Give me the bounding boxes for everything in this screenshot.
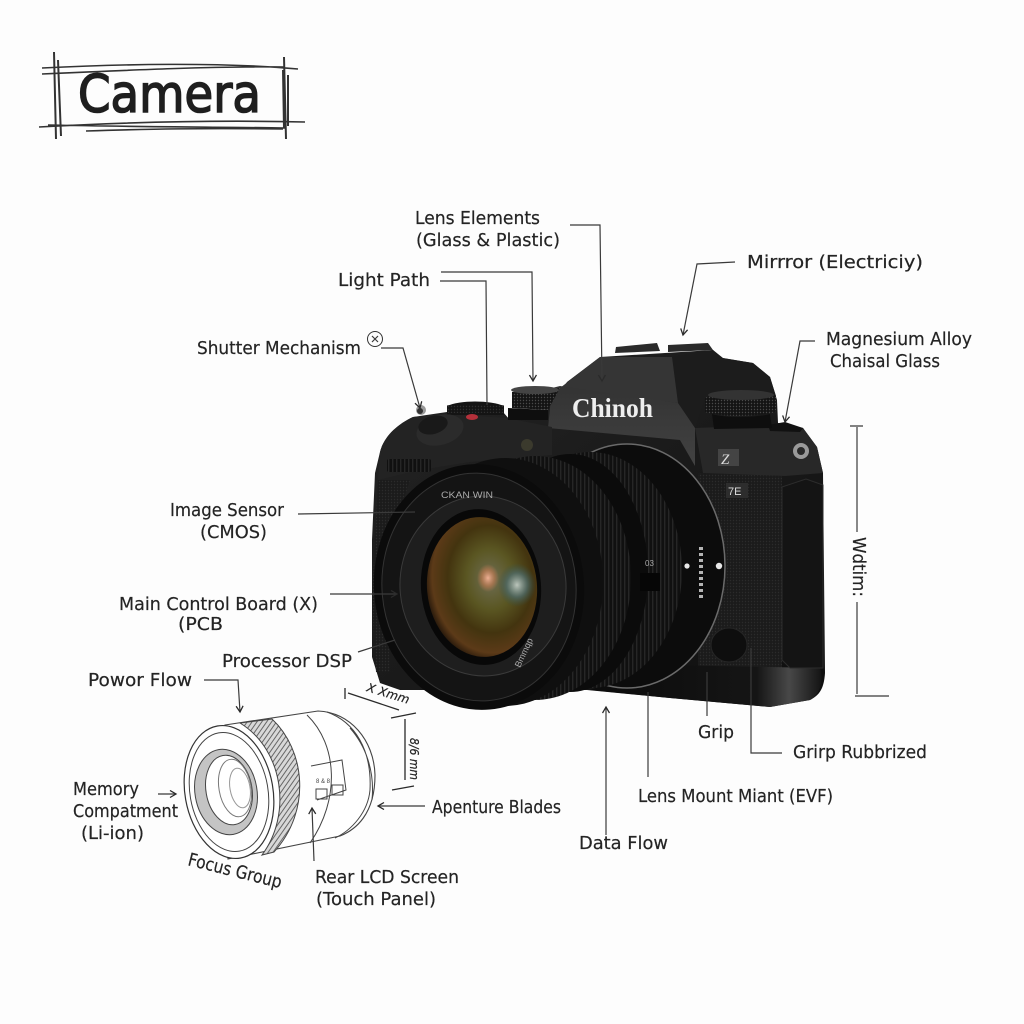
front rim xyxy=(174,718,284,866)
title: Camera in sketched box: Camera xyxy=(78,65,261,125)
label: Rear LCD Screen xyxy=(312,808,459,910)
label: Lens Elements: (Glass & Plastic) xyxy=(416,230,560,251)
lens front outer xyxy=(364,455,594,719)
lens engraved text: CKAN WIN xyxy=(441,490,493,500)
label: Power Flow xyxy=(88,670,240,712)
lens lower text: Bmmqp xyxy=(513,637,535,669)
dimension: X Xmm xyxy=(345,680,411,710)
label: Image Sensor: (CMOS) xyxy=(200,522,267,543)
left grip leather xyxy=(372,480,410,672)
label: Lens Elements: Lens Elements xyxy=(415,208,540,229)
sketch switch panel xyxy=(311,760,346,800)
label: Rear LCD Screen: (Touch Panel) xyxy=(316,889,436,910)
label: Magnesium Alloy xyxy=(785,329,972,422)
brand label: Chinoh xyxy=(572,393,653,423)
label: Memory Compartment: Compatment xyxy=(73,801,178,822)
shutter step xyxy=(768,422,803,432)
barrel outline xyxy=(225,711,375,859)
mode dial xyxy=(447,402,504,420)
label: Focus Group: Focus Group xyxy=(186,849,284,893)
label: Image Sensor xyxy=(170,500,415,543)
viewfinder top face xyxy=(560,357,678,403)
label: Mirror: Mirrror (Electriciy) xyxy=(747,252,923,273)
lens barrel smooth xyxy=(407,458,603,706)
rear end curves xyxy=(327,712,373,838)
label: Memory Compartment xyxy=(73,779,178,844)
rear ribbed ring xyxy=(498,452,682,688)
lens gloss ring xyxy=(372,465,586,709)
rear hump xyxy=(672,350,776,428)
front ring 2 xyxy=(180,726,278,858)
mode switch xyxy=(640,559,660,591)
label: Lens Elements xyxy=(415,208,602,381)
label: Lens Mount: Lens Mount Miant (EVF) xyxy=(638,786,833,807)
dimension: Wdtim xyxy=(848,426,889,696)
label: Mirror xyxy=(683,252,923,335)
sketch lens drawing xyxy=(174,711,375,866)
label: Grip Rubberized xyxy=(751,648,927,763)
label: Memory Compartment: Memory xyxy=(73,779,139,800)
dimension: 8/6 mm: 8/6 mm xyxy=(407,738,421,780)
finder wheel xyxy=(387,459,431,472)
lens reflections xyxy=(477,563,536,607)
label: Magnesium Alloy: Chaisal Glass xyxy=(830,351,940,372)
label: Processor DSP xyxy=(222,640,395,672)
label: Aperture Blades: Apenture Blades xyxy=(432,797,561,818)
front button xyxy=(711,628,747,662)
dimension: X Xmm: X Xmm xyxy=(364,680,411,707)
badge marks: Z xyxy=(721,452,730,468)
label: Main Control Board xyxy=(119,594,397,635)
glass ellipses xyxy=(200,752,258,828)
label: Processor DSP: Processor DSP xyxy=(222,651,352,672)
label: Magnesium Alloy: Magnesium Alloy xyxy=(826,329,972,350)
dimension: 8/6 mm xyxy=(391,713,421,790)
lens glass xyxy=(421,512,543,662)
ribbed focus ring xyxy=(240,719,300,855)
left top deck xyxy=(378,414,552,480)
badge marks xyxy=(718,449,748,498)
lens baffle xyxy=(414,504,548,670)
camera photo xyxy=(364,343,825,719)
front lamp xyxy=(521,439,533,451)
hot shoe xyxy=(615,343,713,353)
label: Light Path: Light Path xyxy=(338,270,430,291)
label: Grip Rubberized: Grirp Rubbrized xyxy=(793,742,927,763)
label: Grip xyxy=(698,672,734,743)
dimension: Wdtim: Wdtim: xyxy=(848,537,869,597)
label: Main Control Board: Main Control Board (X) xyxy=(119,594,318,615)
grey inner ring xyxy=(188,744,264,840)
label: Data Flow: Data Flow xyxy=(579,833,668,854)
right dial xyxy=(705,390,776,429)
top control wheel xyxy=(413,405,467,451)
sketch switch panel: 8 & 8 xyxy=(316,779,331,785)
lens inner ring xyxy=(392,489,574,683)
label: Light Path xyxy=(338,270,533,405)
barrel rings xyxy=(307,715,331,843)
label: Main Control Board: (PCB xyxy=(178,614,223,635)
label: Image Sensor: Image Sensor xyxy=(170,500,285,521)
mode switch: 03 xyxy=(645,559,654,568)
label: Rear LCD Screen: Rear LCD Screen xyxy=(315,867,459,888)
badge marks: 7E xyxy=(728,486,741,498)
lens index dots xyxy=(684,547,722,600)
lens mount ring xyxy=(529,444,725,688)
label: Grip: Grip xyxy=(698,722,734,743)
camera body xyxy=(372,350,825,707)
title: Camera in sketched box xyxy=(39,52,305,139)
label: Power Flow: Powor Flow xyxy=(88,670,192,691)
textured grip leather xyxy=(698,473,782,672)
lens barrel dark band xyxy=(492,454,648,692)
label: Memory Compartment: (Li-ion) xyxy=(81,823,144,844)
strap lug xyxy=(793,443,809,459)
focus ribbed ring xyxy=(439,456,631,700)
viewfinder label panel xyxy=(548,386,695,466)
right shoulder xyxy=(695,425,823,476)
label: Shutter Mechanism: Shutter Mechanism xyxy=(197,338,361,359)
side door panel xyxy=(782,479,823,668)
base plate xyxy=(590,665,822,707)
left dial xyxy=(508,386,560,420)
label: Shutter Mechanism xyxy=(197,332,420,408)
